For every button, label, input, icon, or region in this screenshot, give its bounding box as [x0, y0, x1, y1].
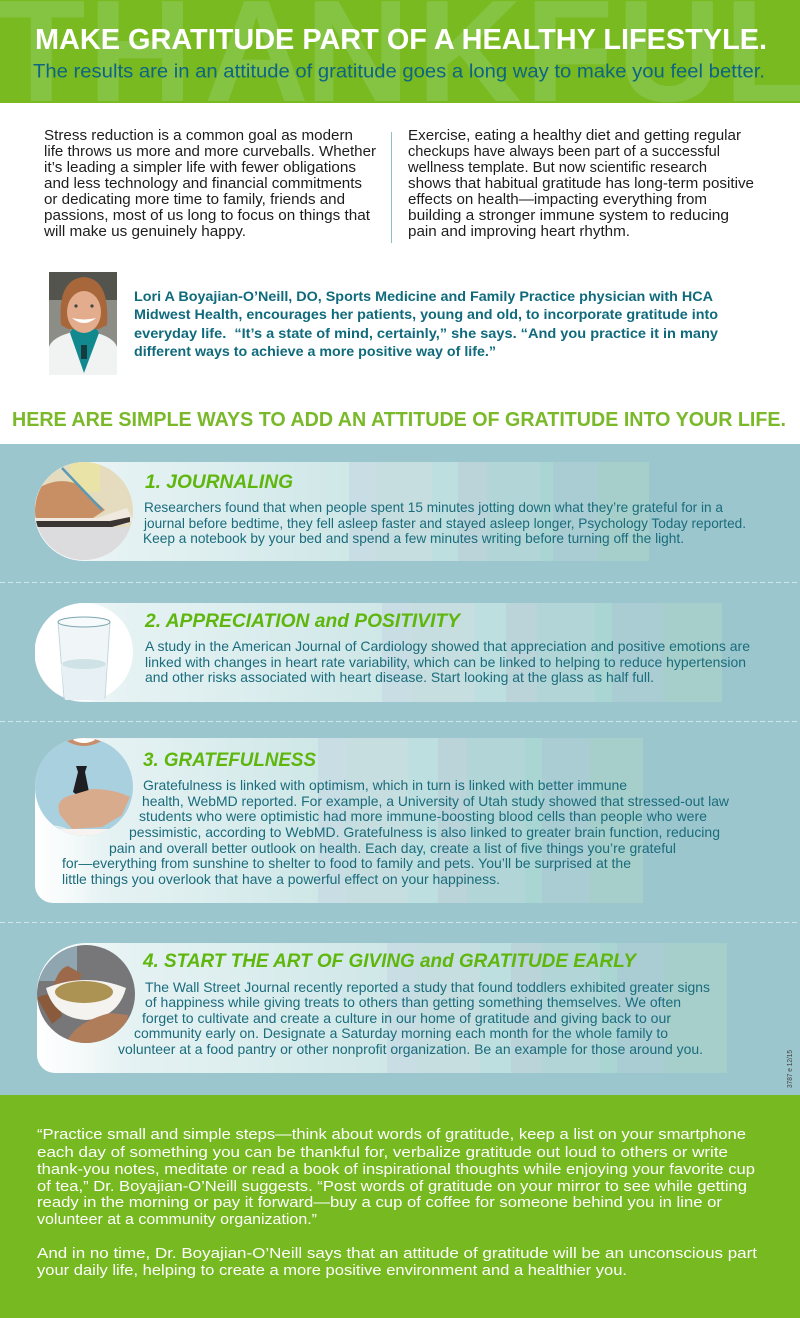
intro text: left column: [43, 128, 376, 240]
text: [118, 979, 710, 1057]
closing footer panel: [0, 1095, 800, 1318]
intro text: left column: will make us genuinely happy.: [43, 224, 246, 240]
intro text: left column: or dedicating more time to family, friends and: [44, 192, 345, 208]
teal panel background: [0, 444, 800, 1095]
closing quote: of tea,” Dr. Boyajian-O’Neill suggests. “Post words of gratitude on your mirror to see while getting: [37, 1178, 747, 1195]
intro text: right column: [407, 128, 754, 240]
closing statement: And in no time, Dr. Boyajian-O’Neill says that an attitude of gratitude will be an unconscious part: [37, 1245, 758, 1262]
closing statement: [37, 1245, 758, 1279]
text: [145, 638, 750, 685]
text: pessimistic, according to WebMD. Gratefulness is also linked to greater brain function, reducing: [129, 824, 720, 840]
heading: 1. JOURNALING: [145, 471, 293, 493]
header banner: [0, 0, 800, 103]
doctor quote: [134, 288, 718, 359]
intro text: right column: pain and improving heart rhythm.: [408, 224, 630, 240]
closing quote: volunteer at a community organization.”: [37, 1211, 317, 1228]
icon: half-full glass of water: [35, 603, 133, 701]
heading: 3. GRATEFULNESS: [143, 749, 316, 771]
print code: 3787 e 12/15: [785, 1050, 794, 1088]
text: [62, 777, 730, 887]
heading: 4. START THE ART OF GIVING and GRATITUDE EARLY: [142, 950, 638, 972]
text: Gratefulness is linked with optimism, which in turn is linked with better immune: [143, 777, 627, 793]
intro text: left column: it’s leading a simpler life with fewer obligations: [44, 160, 356, 176]
portrait of doctor: [49, 272, 117, 375]
text: volunteer at a food pantry or other nonprofit organization. Be an example for those around you.: [118, 1041, 703, 1057]
text: little things you overlook that have a powerful effect on your happiness.: [62, 871, 500, 887]
section heading: HERE ARE SIMPLE WAYS TO ADD AN ATTITUDE OF GRATITUDE INTO YOUR LIFE.: [12, 408, 786, 431]
intro text: right column: checkups have always been part of a successful: [408, 144, 720, 160]
text: [143, 499, 746, 546]
closing quote: ready in the morning or pay it forward—buy a cup of coffee for someone behind you in line or: [37, 1194, 722, 1211]
text: students who were optimistic had more immune-boosting blood cells than people who were: [139, 808, 707, 824]
subtitle: The results are in an attitude of gratitude goes a long way to make you feel better.: [33, 60, 765, 82]
text: pain and overall better outlook on health. Each day, create a list of five things you’re grateful: [109, 840, 676, 856]
text: of happiness while giving treats to others than getting something themselves. We often: [145, 994, 681, 1010]
icon: hand writing in a journal: [35, 462, 133, 561]
closing quote: thank-you notes, meditate or read a book of inspirational thoughts while enjoying your favorite cup: [37, 1161, 755, 1178]
icon: hands sharing a bowl of soup: [37, 945, 135, 1045]
closing quote: each day of something you can be thankful for, verbalize gratitude out loud to others or write: [37, 1144, 728, 1161]
text: community early on. Designate a Saturday morning each month for the whole family to: [134, 1025, 668, 1041]
closing statement: your daily life, helping to create a more positive environment and a healthier you.: [37, 1262, 627, 1279]
text: Keep a notebook by your bed and spend a few minutes writing before turning off the light.: [143, 530, 684, 546]
intro text: right column: shows that habitual gratitude has long-term positive: [408, 176, 754, 192]
text: Researchers found that when people spent 15 minutes jotting down what they’re grateful for in a: [144, 499, 723, 515]
closing quote: “Practice small and simple steps—think about words of gratitude, keep a list on your smartphone: [37, 1126, 746, 1143]
closing quote: [37, 1126, 755, 1228]
intro text: left column: and less technology and financial commitments: [44, 176, 362, 192]
intro text: left column: Stress reduction is a common goal as modern: [44, 128, 353, 144]
text: A study in the American Journal of Cardiology showed that appreciation and positive emotions are: [145, 638, 750, 654]
card 4: art of giving: [37, 943, 727, 1073]
doctor quote: Midwest Health, encourages her patients, young and old, to incorporate gratitude into: [134, 306, 718, 322]
card 1: journaling: [35, 462, 746, 561]
intro text: left column: passions, most of us long to focus on things that: [44, 208, 370, 224]
card 2: appreciation and positivity: [35, 603, 750, 702]
doctor quote: different ways to achieve a more positive way of life.”: [134, 343, 496, 359]
title: MAKE GRATITUDE PART OF A HEALTHY LIFESTYLE.: [35, 24, 767, 56]
text: The Wall Street Journal recently reported a study that found toddlers exhibited greater signs: [145, 979, 710, 995]
doctor quote: Lori A Boyajian-O’Neill, DO, Sports Medicine and Family Practice physician with HCA: [134, 288, 713, 304]
intro text: left column: life throws us more and more curveballs. Whether: [44, 144, 376, 160]
text: and other risks associated with heart disease. Start looking at the glass as half full.: [145, 669, 654, 685]
intro text: right column: Exercise, eating a healthy diet and getting regular: [408, 128, 741, 144]
text: for—everything from sunshine to shelter to food to family and pets. You’ll be surprised at the: [62, 855, 631, 871]
text: journal before bedtime, they fell asleep faster and stayed asleep longer, Psychology Today reported.: [143, 515, 746, 531]
text: health, WebMD reported. For example, a University of Utah study showed that stressed-out law: [142, 793, 730, 809]
card 3: gratefulness: [35, 738, 730, 903]
intro text: right column: wellness template. But now scientific research: [407, 160, 707, 176]
doctor quote: everyday life. “It’s a state of mind, certainly,” she says. “And you practice it in many: [134, 325, 718, 341]
intro text: right column: effects on health—impacting everything from: [408, 192, 707, 208]
heading: 2. APPRECIATION and POSITIVITY: [144, 610, 462, 632]
text: linked with changes in heart rate variability, which can be linked to helping to reduce hypertension: [145, 654, 746, 670]
icon: businessman handshake: [35, 738, 133, 839]
intro text: right column: building a stronger immune system to reducing: [408, 208, 729, 224]
text: forget to cultivate and create a culture in our home of gratitude and giving back to our: [142, 1010, 671, 1026]
